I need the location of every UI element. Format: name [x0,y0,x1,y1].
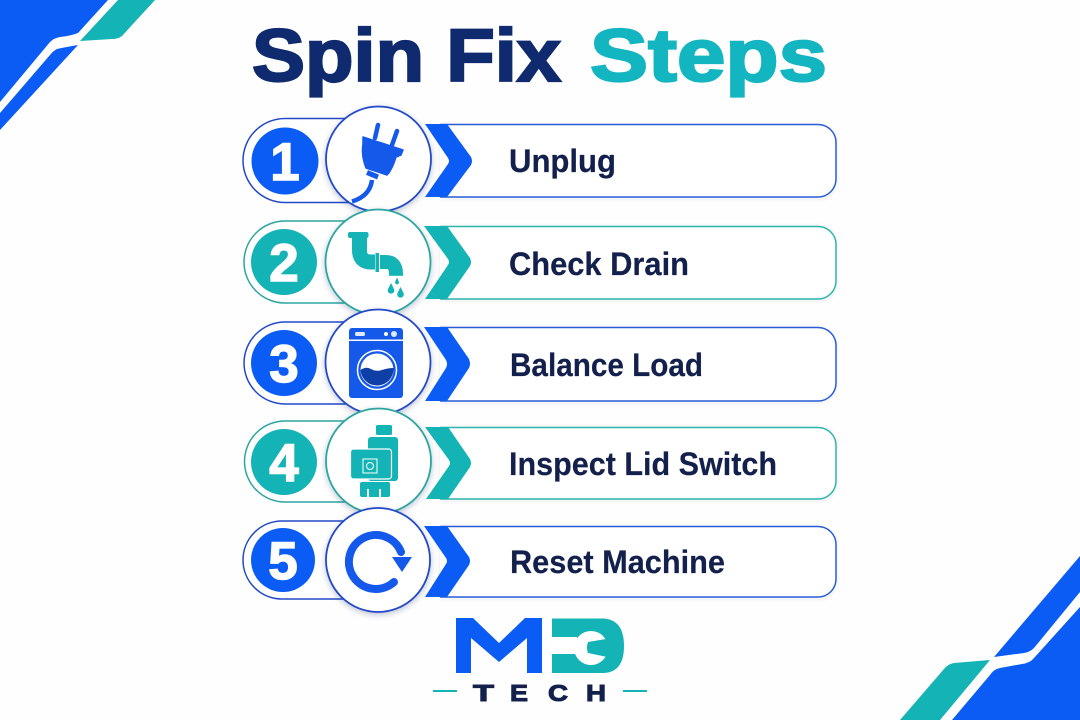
top-left corner decoration [0,0,155,130]
step 4 switch icon [326,408,431,514]
step 5 pill [243,521,378,599]
title [252,14,827,97]
step 2 pill [244,221,378,303]
step 2 number badge: 2 [269,234,299,293]
logo [433,618,647,706]
logo wrench E [552,618,624,673]
step 4 pill [244,421,378,502]
title: Spin Fix [252,14,561,97]
step 4 number badge [251,429,317,495]
step 1 label: Unplug [509,143,616,179]
logo wordmark: E [510,680,528,706]
step 4 number badge: 4 [269,434,299,493]
step 3 chevron [424,327,470,401]
step 1 number badge: 1 [270,133,300,192]
step 1: unplug [243,106,836,212]
step 2 label: Check Drain [509,246,689,282]
step 3 washing machine icon [326,310,430,414]
step 5 reset icon [326,508,430,612]
step 3 number badge: 3 [269,335,299,394]
step 3 card [440,328,836,401]
step 4 card [440,428,836,499]
step 1 plug icon [326,106,431,212]
step 5 number badge [251,528,315,592]
step 3 label: Balance Load [510,347,703,383]
step 3 pill [244,322,378,404]
logo wordmark: H [586,680,606,706]
logo wordmark: C [548,680,568,706]
step 5 number badge: 5 [268,532,298,591]
step 3 number badge [251,330,317,396]
step 2 card [440,226,836,299]
step 1 card [440,124,836,197]
logo wordmark: T [473,680,495,706]
step 4 label: Inspect Lid Switch [509,446,777,482]
logo side rules [433,690,647,692]
logo M [456,618,542,673]
step 5 card [440,526,836,597]
step 3: balance load [244,310,836,414]
step 2 faucet icon [326,210,430,314]
step 5 chevron [424,526,470,597]
step 1 number badge [252,128,318,194]
step 2 number badge [251,229,317,295]
step 2 chevron [424,226,471,299]
step 1 chevron [425,124,472,197]
step 4 chevron [425,427,471,499]
step 5: reset machine [243,508,836,612]
step 2: check drain [244,210,836,314]
title: Steps [590,14,827,97]
step 1 pill [243,118,378,202]
step 5 label: Reset Machine [510,544,725,580]
logo wordmark [473,680,606,706]
bottom-right corner decoration [900,556,1080,720]
step 4: inspect lid switch [244,408,836,514]
